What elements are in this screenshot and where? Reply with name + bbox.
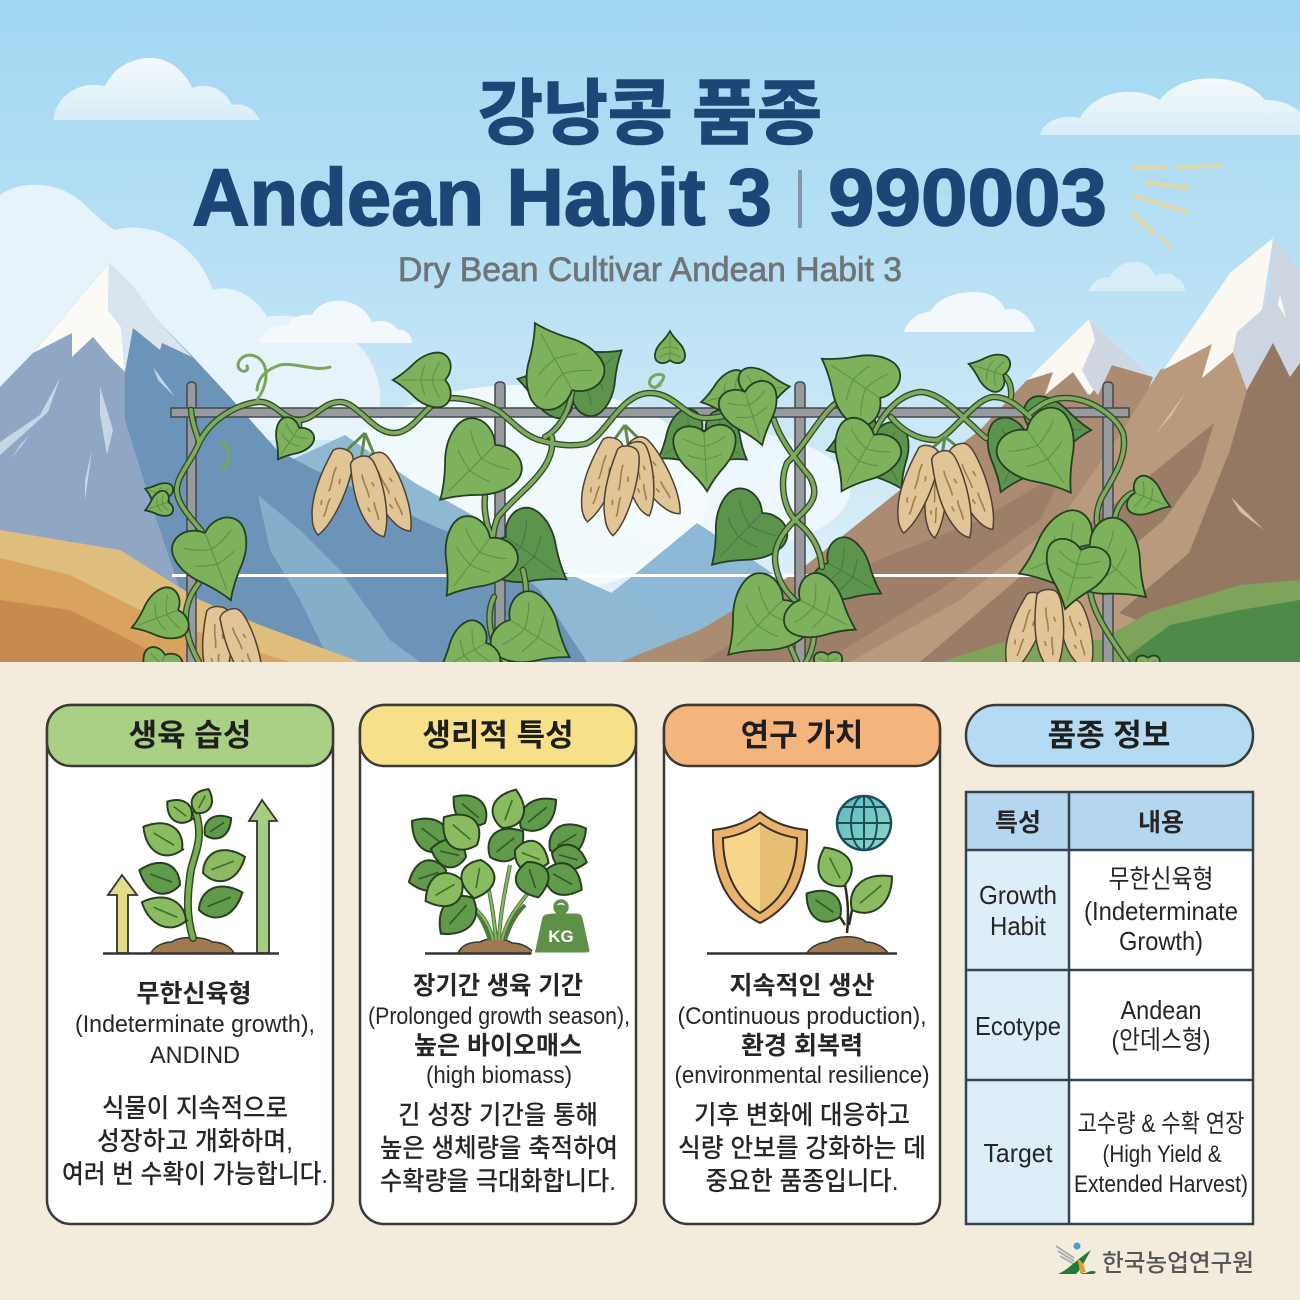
subtitle: Dry Bean Cultivar Andean Habit 3 [398, 251, 902, 289]
row: target: Extended Harvest) [1074, 1171, 1248, 1198]
row: ecotype [975, 995, 1210, 1055]
table: cultivar info [966, 792, 1253, 1224]
heading: growth habit [47, 705, 333, 766]
bright front leaves [122, 304, 1177, 697]
heading: research value [664, 705, 940, 766]
row: growth habit: Growth) [1119, 926, 1203, 956]
vines [177, 355, 1135, 662]
heading: growth habit: 생육 습성 [129, 718, 251, 753]
table header: 내용 [1138, 809, 1184, 837]
heading: physiological traits [360, 705, 636, 766]
text: growth habit: 식물이 지속적으로 [102, 1093, 288, 1123]
panel: growth habit [47, 705, 333, 1224]
text: physiological traits: 수확량을 극대화합니다. [380, 1166, 616, 1196]
text: physiological traits: (Prolonged growth season), [368, 1003, 630, 1030]
text: research value: 환경 회복력 [741, 1032, 863, 1060]
title: Andean Habit 3 [192, 153, 772, 243]
text: research value [674, 972, 930, 1196]
logo: Korea agricultural research institute [1056, 1242, 1254, 1277]
row: growth habit: Growth [979, 880, 1057, 910]
clouds [0, 58, 1300, 440]
text: physiological traits: 높은 생체량을 축적하여 [380, 1133, 618, 1163]
text: research value: 지속적인 생산 [730, 972, 874, 1000]
table header [995, 809, 1184, 837]
trellis [171, 382, 1129, 672]
text: growth habit: (Indeterminate growth), [75, 1011, 315, 1038]
row: ecotype: Ecotype [975, 1011, 1061, 1041]
row: ecotype: (안데스형) [1112, 1025, 1210, 1055]
logo: Korea agricultural research institute: 한국농업연구원 [1102, 1250, 1254, 1277]
bean pods, left cluster [311, 432, 412, 538]
dark back leaves [477, 324, 1092, 621]
title: 990003 [828, 153, 1107, 243]
icon: shield, globe and sprout [707, 796, 902, 954]
text: research value: (Continuous production), [678, 1003, 926, 1030]
sun rays [1132, 166, 1220, 247]
text: research value: (environmental resilience) [674, 1062, 930, 1089]
pale haze behind trellis [330, 385, 850, 595]
heading: research value: 연구 가치 [741, 718, 863, 753]
sky [0, 0, 1300, 593]
bean pods, lower left [202, 606, 262, 662]
row: growth habit: Habit [990, 911, 1047, 941]
icon: bushy plant with KG weight: KG [548, 927, 574, 946]
text: growth habit: 성장하고 개화하며, [97, 1126, 293, 1156]
bean pods, lower right [1005, 588, 1094, 662]
table header: 특성 [995, 809, 1041, 837]
text: physiological traits: 높은 바이오매스 [414, 1032, 582, 1060]
title: 강낭콩 품종 [478, 75, 822, 154]
row: target: 고수량 & 수확 연장 [1078, 1110, 1244, 1138]
green hills [940, 580, 1300, 662]
row: ecotype: Andean [1120, 995, 1202, 1025]
heading: cultivar info [966, 705, 1253, 766]
text: physiological traits: (high biomass) [426, 1062, 572, 1089]
heading: cultivar info: 품종 정보 [1048, 718, 1170, 753]
title [192, 75, 1107, 243]
icon: growing plant with arrows [103, 785, 279, 954]
text: growth habit [62, 980, 328, 1189]
text: research value: 기후 변화에 대응하고 [694, 1100, 910, 1130]
left mountain [0, 263, 587, 662]
row: target [984, 1110, 1248, 1198]
right mountains [620, 238, 1300, 662]
panel: research value [664, 705, 940, 1224]
panel: physiological traits [360, 705, 636, 1224]
text: research value: 중요한 품종입니다. [706, 1166, 898, 1196]
text: growth habit: ANDIND [150, 1042, 240, 1069]
row: growth habit: (Indeterminate [1084, 896, 1238, 926]
heading: physiological traits: 생리적 특성 [422, 718, 574, 753]
row: target: (High Yield & [1102, 1141, 1222, 1168]
text: growth habit: 여러 번 수확이 가능합니다. [62, 1159, 328, 1189]
bean pods, centre cluster [580, 424, 681, 537]
text: physiological traits [368, 972, 630, 1196]
text: physiological traits: 장기간 생육 기간 [413, 972, 583, 1000]
text: physiological traits: 긴 성장 기간을 통해 [398, 1100, 598, 1130]
row: growth habit: 무한신육형 [1108, 864, 1214, 894]
text: growth habit: 무한신육형 [136, 980, 252, 1008]
icon: bushy plant with KG weight [403, 784, 594, 954]
row: growth habit [979, 864, 1238, 956]
text: research value: 식량 안보를 강화하는 데 [678, 1133, 926, 1163]
row: target: Target [984, 1138, 1053, 1168]
distant blue mountains [270, 435, 790, 662]
bean pods, right cluster [897, 436, 994, 539]
logo mark [1056, 1242, 1096, 1274]
illustration: Andean landscape with bean trellis [0, 0, 1300, 697]
golden foothills [0, 530, 360, 662]
